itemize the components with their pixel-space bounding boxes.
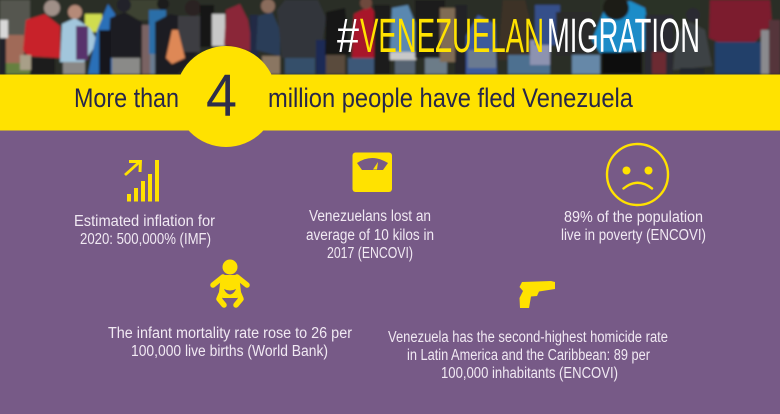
banner: yellow strip with number circle	[0, 46, 780, 147]
text: poverty: live in poverty (ENCOVI)	[561, 227, 706, 244]
text: weight loss	[306, 208, 434, 262]
text: inflation	[74, 213, 215, 248]
text: weight loss: average of 10 kilos in	[306, 227, 434, 244]
text: infant mortality	[108, 325, 352, 360]
icon: rising bar chart with arrow	[125, 160, 159, 202]
title: #VenezuelanMigration hashtag: #	[337, 10, 359, 63]
heading: million people have fled Venezuela: million people have fled Venezuela	[268, 83, 634, 113]
text: homicide rate: in Latin America and the Caribbean: 89 per	[407, 347, 650, 364]
text: weight loss: 2017 (ENCOVI)	[327, 245, 413, 262]
text: homicide rate	[388, 329, 668, 382]
icon: baby	[213, 260, 247, 305]
panel: purple background	[0, 130, 780, 414]
text: poverty	[561, 209, 706, 244]
text: infant mortality: 100,000 live births (World Bank)	[131, 343, 328, 360]
text: inflation: Estimated inflation for	[74, 213, 215, 230]
text: infant mortality: The infant mortality rate rose to 26 per	[108, 325, 352, 342]
icon: weighing scale	[352, 152, 392, 192]
icon: sad face	[607, 144, 668, 205]
text: weight loss: Venezuelans lost an	[309, 208, 431, 225]
heading: More than: More than	[74, 83, 179, 113]
photo: crowd of migrants queueing	[0, 0, 780, 79]
title: #VenezuelanMigration hashtag: VENEZUELAN	[360, 10, 544, 63]
text: homicide rate: Venezuela has the second-highest homicide rate	[388, 329, 668, 346]
big number 4: 4	[206, 63, 237, 129]
text: inflation: 2020: 500,000% (IMF)	[80, 231, 211, 248]
icon: handgun	[520, 281, 555, 308]
text: homicide rate: 100,000 inhabitants (ENCOVI)	[441, 365, 618, 382]
text: poverty: 89% of the population	[564, 209, 703, 226]
